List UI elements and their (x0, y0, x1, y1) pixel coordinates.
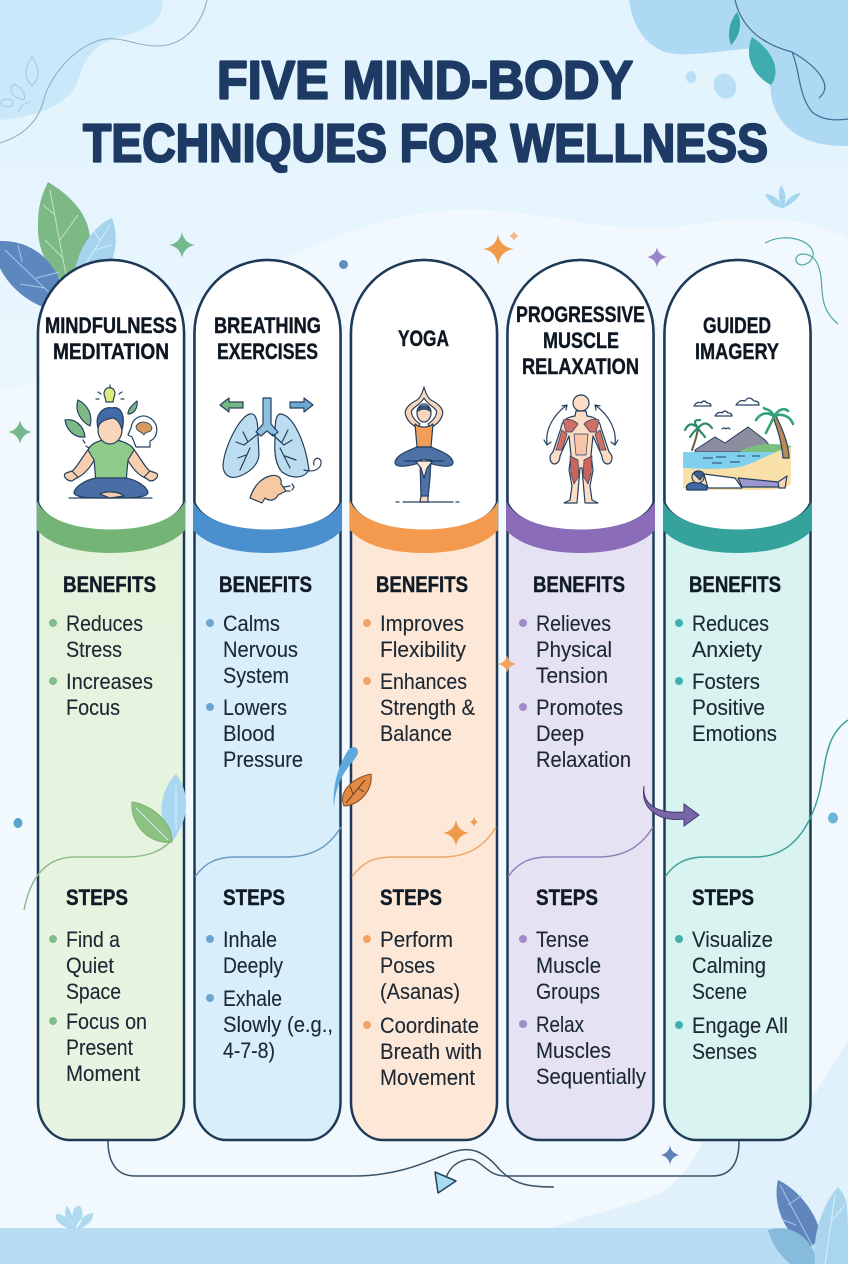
decoration: sparkles and dots (8, 185, 838, 1165)
benefits: breathing: Pressure (223, 747, 303, 772)
steps: guided imagery: Senses (692, 1039, 757, 1064)
heading: yoga: YOGA (398, 326, 449, 351)
benefits: mindfulness: Focus (66, 695, 120, 720)
steps: yoga: Breath with (380, 1039, 482, 1064)
band: guided imagery (663, 501, 812, 553)
arrow: purple curved (643, 786, 699, 826)
benefits: progressive: Relieves (536, 611, 611, 636)
benefits: guided imagery: Emotions (692, 721, 777, 746)
steps: mindfulness: Present (66, 1035, 133, 1060)
benefits: mindfulness: BENEFITS (63, 572, 156, 597)
panel: mindfulness meditation (37, 260, 185, 1140)
heading: breathing exercises: EXERCISES (217, 339, 318, 364)
heading: guided imagery (695, 313, 779, 364)
benefits: breathing: Calms (223, 611, 280, 636)
bottom connector (108, 1141, 739, 1187)
steps: mindfulness: STEPS (66, 885, 128, 910)
steps: mindfulness: Moment (66, 1061, 140, 1086)
icon: meditating person (64, 385, 158, 498)
benefits: progressive: Tension (536, 663, 608, 688)
small plant: bottom left (56, 1206, 93, 1230)
panel: breathing exercises (193, 260, 342, 1140)
benefits: progressive (519, 572, 631, 772)
heading: progressive muscle relaxation: RELAXATION (522, 354, 639, 379)
steps: progressive (519, 885, 646, 1089)
steps: breathing: Slowly (e.g., (223, 1012, 333, 1037)
steps: progressive: Relax (536, 1012, 584, 1037)
steps: yoga: Poses (380, 953, 435, 978)
icon: lungs (220, 398, 321, 503)
heading: progressive muscle relaxation: PROGRESSIVE (516, 302, 645, 327)
benefits: guided imagery: Positive (692, 695, 765, 720)
steps: progressive: Muscle (536, 953, 601, 978)
steps: yoga: (Asanas) (380, 979, 460, 1004)
steps: breathing (206, 885, 333, 1063)
steps: yoga: Perform (380, 927, 453, 952)
heading: progressive muscle relaxation (516, 302, 645, 379)
band: breathing (193, 501, 342, 553)
steps: progressive: Muscles (536, 1038, 611, 1063)
steps: progressive: Tense (536, 927, 589, 952)
main title: FIVE MIND-BODY (217, 50, 633, 110)
benefits: yoga: Balance (380, 721, 452, 746)
heading: mindfulness meditation (45, 313, 177, 364)
steps: progressive: Groups (536, 979, 600, 1004)
steps: breathing: Deeply (223, 953, 283, 978)
benefits: yoga: Flexibility (380, 637, 466, 662)
steps: progressive: Sequentially (536, 1064, 646, 1089)
steps: mindfulness (49, 885, 147, 1086)
heading: mindfulness meditation: MINDFULNESS (45, 313, 177, 338)
benefits: progressive: Physical (536, 637, 612, 662)
icon: muscular body (544, 395, 618, 503)
benefits: mindfulness: Increases (66, 669, 153, 694)
benefits: guided imagery (675, 572, 781, 746)
benefits: guided imagery: Anxiety (692, 637, 762, 662)
steps: guided imagery: Engage All (692, 1013, 788, 1038)
steps: breathing: Inhale (223, 927, 277, 952)
steps: guided imagery (675, 885, 788, 1064)
icon: yoga pose (395, 387, 459, 502)
benefits: mindfulness (49, 572, 156, 720)
benefits: breathing: Blood (223, 721, 275, 746)
benefits: guided imagery: Reduces (692, 611, 769, 636)
decoration: top-left leaves (0, 182, 116, 307)
benefits: breathing: System (223, 663, 289, 688)
decoration: top-right blob and vine (629, 0, 848, 146)
steps: yoga: STEPS (380, 885, 442, 910)
flowing wave lines across panels (24, 720, 848, 910)
benefits: guided imagery: Fosters (692, 669, 760, 694)
band: yoga (350, 501, 498, 553)
benefits: breathing: Lowers (223, 695, 287, 720)
main title (83, 50, 768, 174)
heading: progressive muscle relaxation: MUSCLE (543, 328, 619, 353)
benefits: mindfulness: Reduces (66, 611, 143, 636)
panel: guided imagery (663, 260, 812, 1140)
heading: mindfulness meditation: MEDITATION (53, 339, 169, 364)
benefits: progressive: Relaxation (536, 747, 631, 772)
benefits: breathing: Nervous (223, 637, 298, 662)
benefits: progressive: Deep (536, 721, 584, 746)
steps: mindfulness: Find a (66, 927, 121, 952)
steps: breathing: STEPS (223, 885, 285, 910)
steps: breathing: 4-7-8) (223, 1038, 275, 1063)
steps: mindfulness: Quiet (66, 953, 114, 978)
benefits: mindfulness: Stress (66, 637, 122, 662)
icon: beach scene (683, 398, 793, 490)
benefits: breathing (206, 572, 312, 772)
heading: breathing exercises: BREATHING (214, 313, 321, 338)
steps: mindfulness: Space (66, 979, 121, 1004)
steps: breathing: Exhale (223, 986, 282, 1011)
heading: breathing exercises (214, 313, 321, 364)
steps: progressive: STEPS (536, 885, 598, 910)
panel: yoga (350, 260, 498, 1140)
benefits: yoga: Enhances (380, 669, 467, 694)
benefits: guided imagery: BENEFITS (689, 572, 781, 597)
panel: progressive muscle relaxation (506, 260, 655, 1140)
benefits: progressive: Promotes (536, 695, 623, 720)
benefits: yoga: BENEFITS (376, 572, 468, 597)
steps: guided imagery: Scene (692, 979, 747, 1004)
steps: yoga: Coordinate (380, 1013, 479, 1038)
arrowhead: bottom (435, 1172, 456, 1193)
steps: guided imagery: STEPS (692, 885, 754, 910)
sparkle: yoga panel (443, 655, 516, 846)
heading: guided imagery: GUIDED (703, 313, 771, 338)
leaves: bottom right (768, 1180, 848, 1264)
benefits: breathing: BENEFITS (219, 572, 312, 597)
benefits: yoga (363, 572, 475, 746)
benefits: yoga: Improves (380, 611, 464, 636)
steps: yoga (363, 885, 482, 1090)
band: progressive (506, 501, 655, 553)
heading: guided imagery: IMAGERY (695, 339, 779, 364)
leaves: panel one (132, 774, 186, 842)
steps: guided imagery: Calming (692, 953, 766, 978)
benefits: yoga: Strength & (380, 695, 475, 720)
swoosh and leaf between panels (334, 747, 371, 808)
benefits: progressive: BENEFITS (533, 572, 625, 597)
decoration: top-left blob and line (0, 0, 207, 143)
steps: yoga: Movement (380, 1065, 475, 1090)
steps: guided imagery: Visualize (692, 927, 773, 952)
steps: mindfulness: Focus on (66, 1009, 147, 1034)
band: mindfulness (37, 501, 185, 553)
